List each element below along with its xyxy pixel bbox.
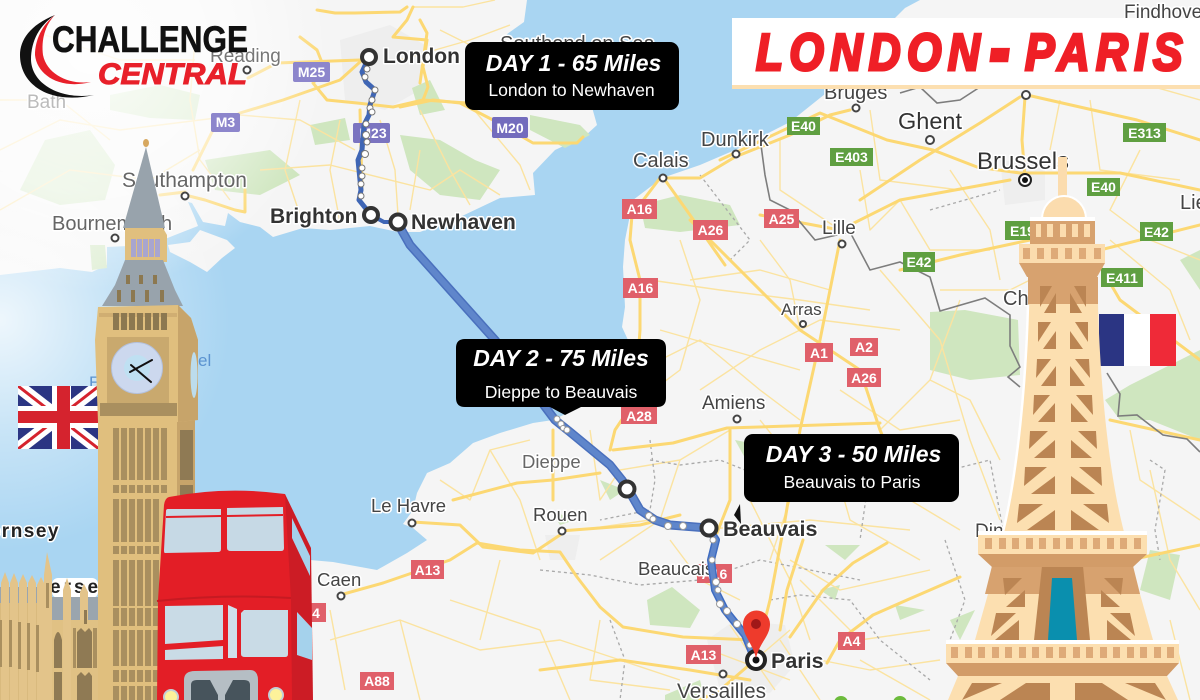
route: London to Brighton [358,57,378,215]
motorway shields: France: A13 [691,647,717,663]
tower upper body [1003,277,1124,532]
place names: Bournemouth [52,213,172,235]
title banner: PARIS [1025,24,1189,82]
place names: Beauvais [723,517,817,541]
place names: Rouen [533,504,588,525]
Big Ben [95,139,198,700]
motorway shields: UK: M3 [216,114,235,130]
red location pin [743,610,770,658]
clock face [112,342,162,394]
place names: Southend on Sea [500,33,655,55]
place names: Brighton [270,205,357,228]
upper deck windows [164,507,310,576]
Eiffel Tower [946,157,1179,700]
lower deck windows [165,605,312,660]
country border lines [761,87,1200,452]
place names: Bath [27,92,66,113]
route: Brighton to Newhaven [371,215,397,222]
double-decker bus [157,491,313,700]
lower legs [975,566,1153,640]
European route shields: E42 [1144,224,1169,240]
motorway shields: France: 4 [312,605,320,621]
route stop markers [362,50,716,536]
place names: London [383,45,460,68]
motorway shields: UK: M25 [298,64,325,80]
first platform [978,531,1147,567]
place names: Southampton [122,169,247,192]
place names: Calais [633,150,689,172]
place names: Ghent [898,108,962,134]
spire finial [143,139,149,147]
small black pointer [734,504,741,524]
European route shields: E40 [791,118,816,134]
logo red crescent [35,15,91,84]
Isle of Wight [168,230,235,272]
sea: English Channel and North Sea [0,0,920,700]
place names: Reading [210,46,281,67]
place names: el [198,351,211,370]
route waypoint dots [554,416,753,648]
motorway shields: UK: M20 [496,120,524,136]
callout: day 3 [744,434,959,502]
top gallery [1030,217,1095,244]
urban areas [340,25,1045,693]
city dots [112,66,1031,678]
Houses of Parliament [0,552,101,700]
tower shaft [98,410,195,700]
grey roofs [0,587,98,620]
place names: Beaucais [638,558,714,579]
title banner [732,0,1200,107]
place names: Dieppe [522,451,581,472]
tower white edge [1003,305,1028,532]
flag: France [1099,314,1176,366]
route: Beauvais to Paris [708,528,755,660]
logo: Challenge Central [20,15,248,98]
tower collar shade [1028,277,1098,304]
callout: day 1: DAY 1 - 65 Miles [486,50,661,76]
flag: United Kingdom [18,386,99,449]
place names: Brussels [977,148,1069,175]
motorway shields: France: A1 [810,345,828,361]
place names: Caen [317,569,361,590]
European route shields: E42 [907,254,932,270]
place names: Dunkirk [701,129,770,151]
bus side panel [285,494,313,700]
motorway shields: France: A28 [626,408,652,424]
antenna [1058,157,1067,196]
motorway shields: France: A2 [855,339,873,355]
slate roof [102,260,183,306]
callout: day 2: DAY 2 - 75 Miles [473,345,649,371]
European route shields [787,117,1173,287]
second gallery [1019,244,1105,277]
motorway shields: France: A13 [415,562,441,578]
callout: day 3: Beauvais to Paris [784,472,921,492]
belfry [125,228,167,262]
road shields [211,62,1173,690]
white coast patch and Jersey label behind the roofline: erse [50,577,101,598]
callout: day 1: London to Newhaven [488,80,655,100]
European route shields: E403 [835,149,868,165]
callout: day 2 [456,339,666,415]
motorway shields: France: A25 [769,211,795,227]
place names: Lille [822,218,856,239]
place names: Le Havre [371,495,446,516]
place names: Amiens [702,393,765,414]
motorway shields: France: A26 [698,222,724,238]
walls [0,603,98,700]
motorway shields: UK: M23 [359,125,387,141]
motorway shields: France: A88 [364,673,390,689]
place names: Newhaven [411,211,516,234]
motorway shields: France: A16 [628,280,654,296]
logo black crescent [20,15,94,98]
dome [1042,196,1086,219]
arched windows [54,628,92,700]
motorway shields: France [300,199,881,690]
white fade behind the logo [0,0,330,290]
radiator grille [184,670,258,700]
motorway shields: France: A16 [702,566,728,582]
callout: day 3: DAY 3 - 50 Miles [766,441,941,467]
tower base [948,676,1178,700]
European route shields: E19 [1010,223,1035,239]
place names: Charleroi [1003,288,1084,310]
callout: day 1 [465,42,679,110]
route line London to Paris [358,57,755,660]
European route shields: E411 [1106,270,1138,286]
lattice right [1070,286,1109,530]
route: Newhaven across the Channel to Beauvais [397,222,708,528]
place names: Paris [771,649,824,673]
second platform [946,640,1179,676]
bus mid band [157,597,291,601]
motorway shields: France: A4 [843,633,861,649]
motorway shields: France: A16 [627,201,653,217]
bus front [157,491,292,700]
place names: E [89,373,100,392]
headlights [164,688,283,700]
motorway shields: France: A26 [851,370,877,386]
title banner: LONDON [756,24,986,82]
spire [123,147,165,228]
callout: day 2: Dieppe to Beauvais [485,382,637,402]
place names: Bruges [824,82,887,104]
place names: Arras [781,300,822,319]
lattice left [1017,286,1056,530]
turrets [1,552,88,700]
dashed regional borders [540,175,1165,700]
place names: Dinant [975,521,1031,542]
white fade at left of the sea [0,90,240,550]
European route shields: E313 [1128,125,1161,141]
Paris marker [747,651,765,669]
European route shields: E40 [1091,179,1116,195]
logo word: challenge: CHALLENGE [52,19,248,60]
windows [0,583,97,672]
motorway shields: UK [211,62,528,143]
green map pins at bottom edge [834,696,907,700]
clock section [95,305,198,422]
logo word: central: CENTRAL [98,58,247,91]
